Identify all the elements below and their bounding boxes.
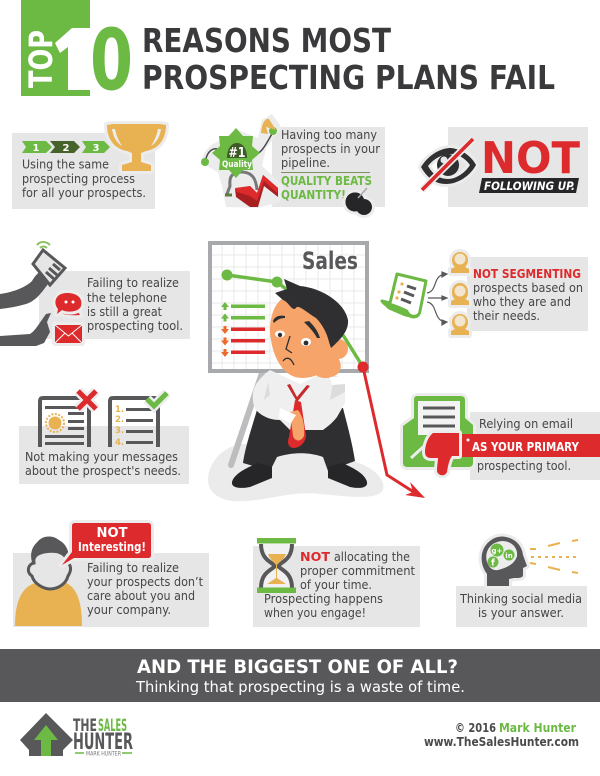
text: when you engage! [264,606,366,620]
icon: envelope [403,396,473,467]
icon: right document [110,393,167,448]
logo mark [20,713,73,756]
footer credit: © 2016 [455,721,496,735]
NOT: NOT [481,133,580,184]
footer credit: Mark Hunter [499,721,576,735]
steps 1 2 3: 2 [63,143,70,154]
text: prospects based on [473,281,583,295]
icon: wrong document [40,391,96,447]
text: is your answer. [478,606,564,620]
logo wordmark: SALES [98,716,127,736]
panel: telephone [0,242,190,346]
sales board [210,243,367,371]
man [232,279,367,488]
icon: arm with phone [0,242,65,309]
speech bubble [62,523,151,565]
floor shadow [208,444,383,501]
panel: too many prospects [201,114,385,215]
icon: right document: 4. [115,438,124,448]
icon: hand [0,313,51,346]
text: your prospects don’t [87,575,203,589]
text: pipeline. [281,156,330,170]
panel: commitment of time [253,538,420,627]
logo wordmark: MARK HUNTER [86,750,121,758]
text: QUALITY BEATS [281,174,372,188]
text: NOT [300,550,331,564]
following up label: FOLLOWING UP. [484,179,575,193]
text [87,561,203,617]
panel: not segmenting [382,252,588,335]
steps 1 2 3: 3 [93,143,100,154]
text: prospecting tool. [87,319,183,333]
text: allocating the [334,550,410,564]
text [459,592,582,620]
text [281,128,380,202]
text: Thinking social media [459,592,582,606]
bottom banner [0,649,600,702]
text: Prospecting happens [264,592,383,606]
footer credit: www.TheSalesHunter.com [424,735,579,749]
logo wordmark [73,716,133,758]
text [473,267,583,323]
title block [21,0,555,110]
panel: relying on email [403,396,600,480]
icon: crossed eye [421,139,476,190]
icon: head with social bubbles: g+ [492,547,503,555]
red banner [462,434,600,457]
icon: right document: 3. [115,426,124,436]
panel: social media [456,536,587,627]
text [264,550,415,620]
icon: black weight [346,188,372,215]
text: Failing to realize [87,276,179,290]
icon: head with social bubbles [482,536,527,586]
icon: person [15,538,82,626]
arrows to people [427,272,447,325]
declining trend line [222,270,425,498]
text: prospecting process [22,172,135,186]
logo wordmark: HUNTER [73,730,133,755]
steps 1 2 3 [22,141,110,154]
steps 1 2 3: 1 [33,143,40,154]
panel: same process [12,124,166,209]
text: for all your prospects. [22,186,146,200]
icon: head with social bubbles: f [491,558,495,568]
logo: the sales hunter [20,713,133,758]
top 10 badge: TOP [22,30,60,88]
text: Using the same [22,158,109,172]
panel: not interesting [13,523,209,627]
text: NOT SEGMENTING [473,267,581,281]
icon: red tracks [235,175,278,207]
icon: hourglass [257,538,296,593]
sound dashes [530,540,578,573]
text: of your time. [300,578,372,592]
text: is still a great [87,305,162,319]
text: care about you and [87,589,195,603]
logo wordmark: THE [73,716,97,736]
heading: REASONS MOST [142,21,391,60]
text: Having too many [281,128,377,142]
icon: three people [451,252,469,335]
icon: thumbs down [425,433,459,475]
text [22,158,146,200]
heading [142,21,555,97]
text: Not making your messages [25,450,178,464]
icon: trophy [107,124,166,171]
chart bars [221,302,265,357]
icon: right document: 2. [115,415,124,425]
easel leg [231,373,262,465]
text: proper commitment [300,564,415,578]
text: your company. [87,603,171,617]
icon: quality mascot: #1 [228,146,246,161]
top 10 badge: 0 [90,12,133,110]
icon: right document: 1. [115,405,124,415]
icon: list document [382,274,426,317]
icon: speech bubbles [55,293,81,315]
sales board: Sales [302,247,358,275]
halo [201,114,284,208]
bottom banner: AND THE BIGGEST ONE OF ALL? [137,656,458,678]
icon: quality mascot: Quality [222,160,252,170]
text: prospects in your [281,142,380,156]
text: who they are and [473,295,571,309]
text: their needs. [473,309,540,323]
text: about the prospect's needs. [25,464,181,478]
text [87,276,183,333]
icon: envelope [55,325,82,343]
footer credit [424,721,579,749]
text: AS YOUR PRIMARY [472,440,579,454]
speech bubble: NOT [96,525,128,541]
panel: not following up [421,127,588,207]
speech bubble: Interesting! [78,540,146,554]
text [25,450,181,478]
center illustration: sales chart and man [208,243,425,501]
text: the telephone [87,291,167,305]
top 10 badge [21,0,133,110]
panel: prospect's needs [19,391,189,484]
text: QUANTITY! [281,188,346,202]
text: Relying on email [479,417,573,431]
icon: head with social bubbles: in [505,552,513,560]
icon: quality mascot [201,119,277,195]
text: Failing to realize [87,561,179,575]
bottom banner: Thinking that prospecting is a waste of time. [135,678,465,696]
text [466,417,579,473]
text: prospecting tool. [477,459,571,473]
